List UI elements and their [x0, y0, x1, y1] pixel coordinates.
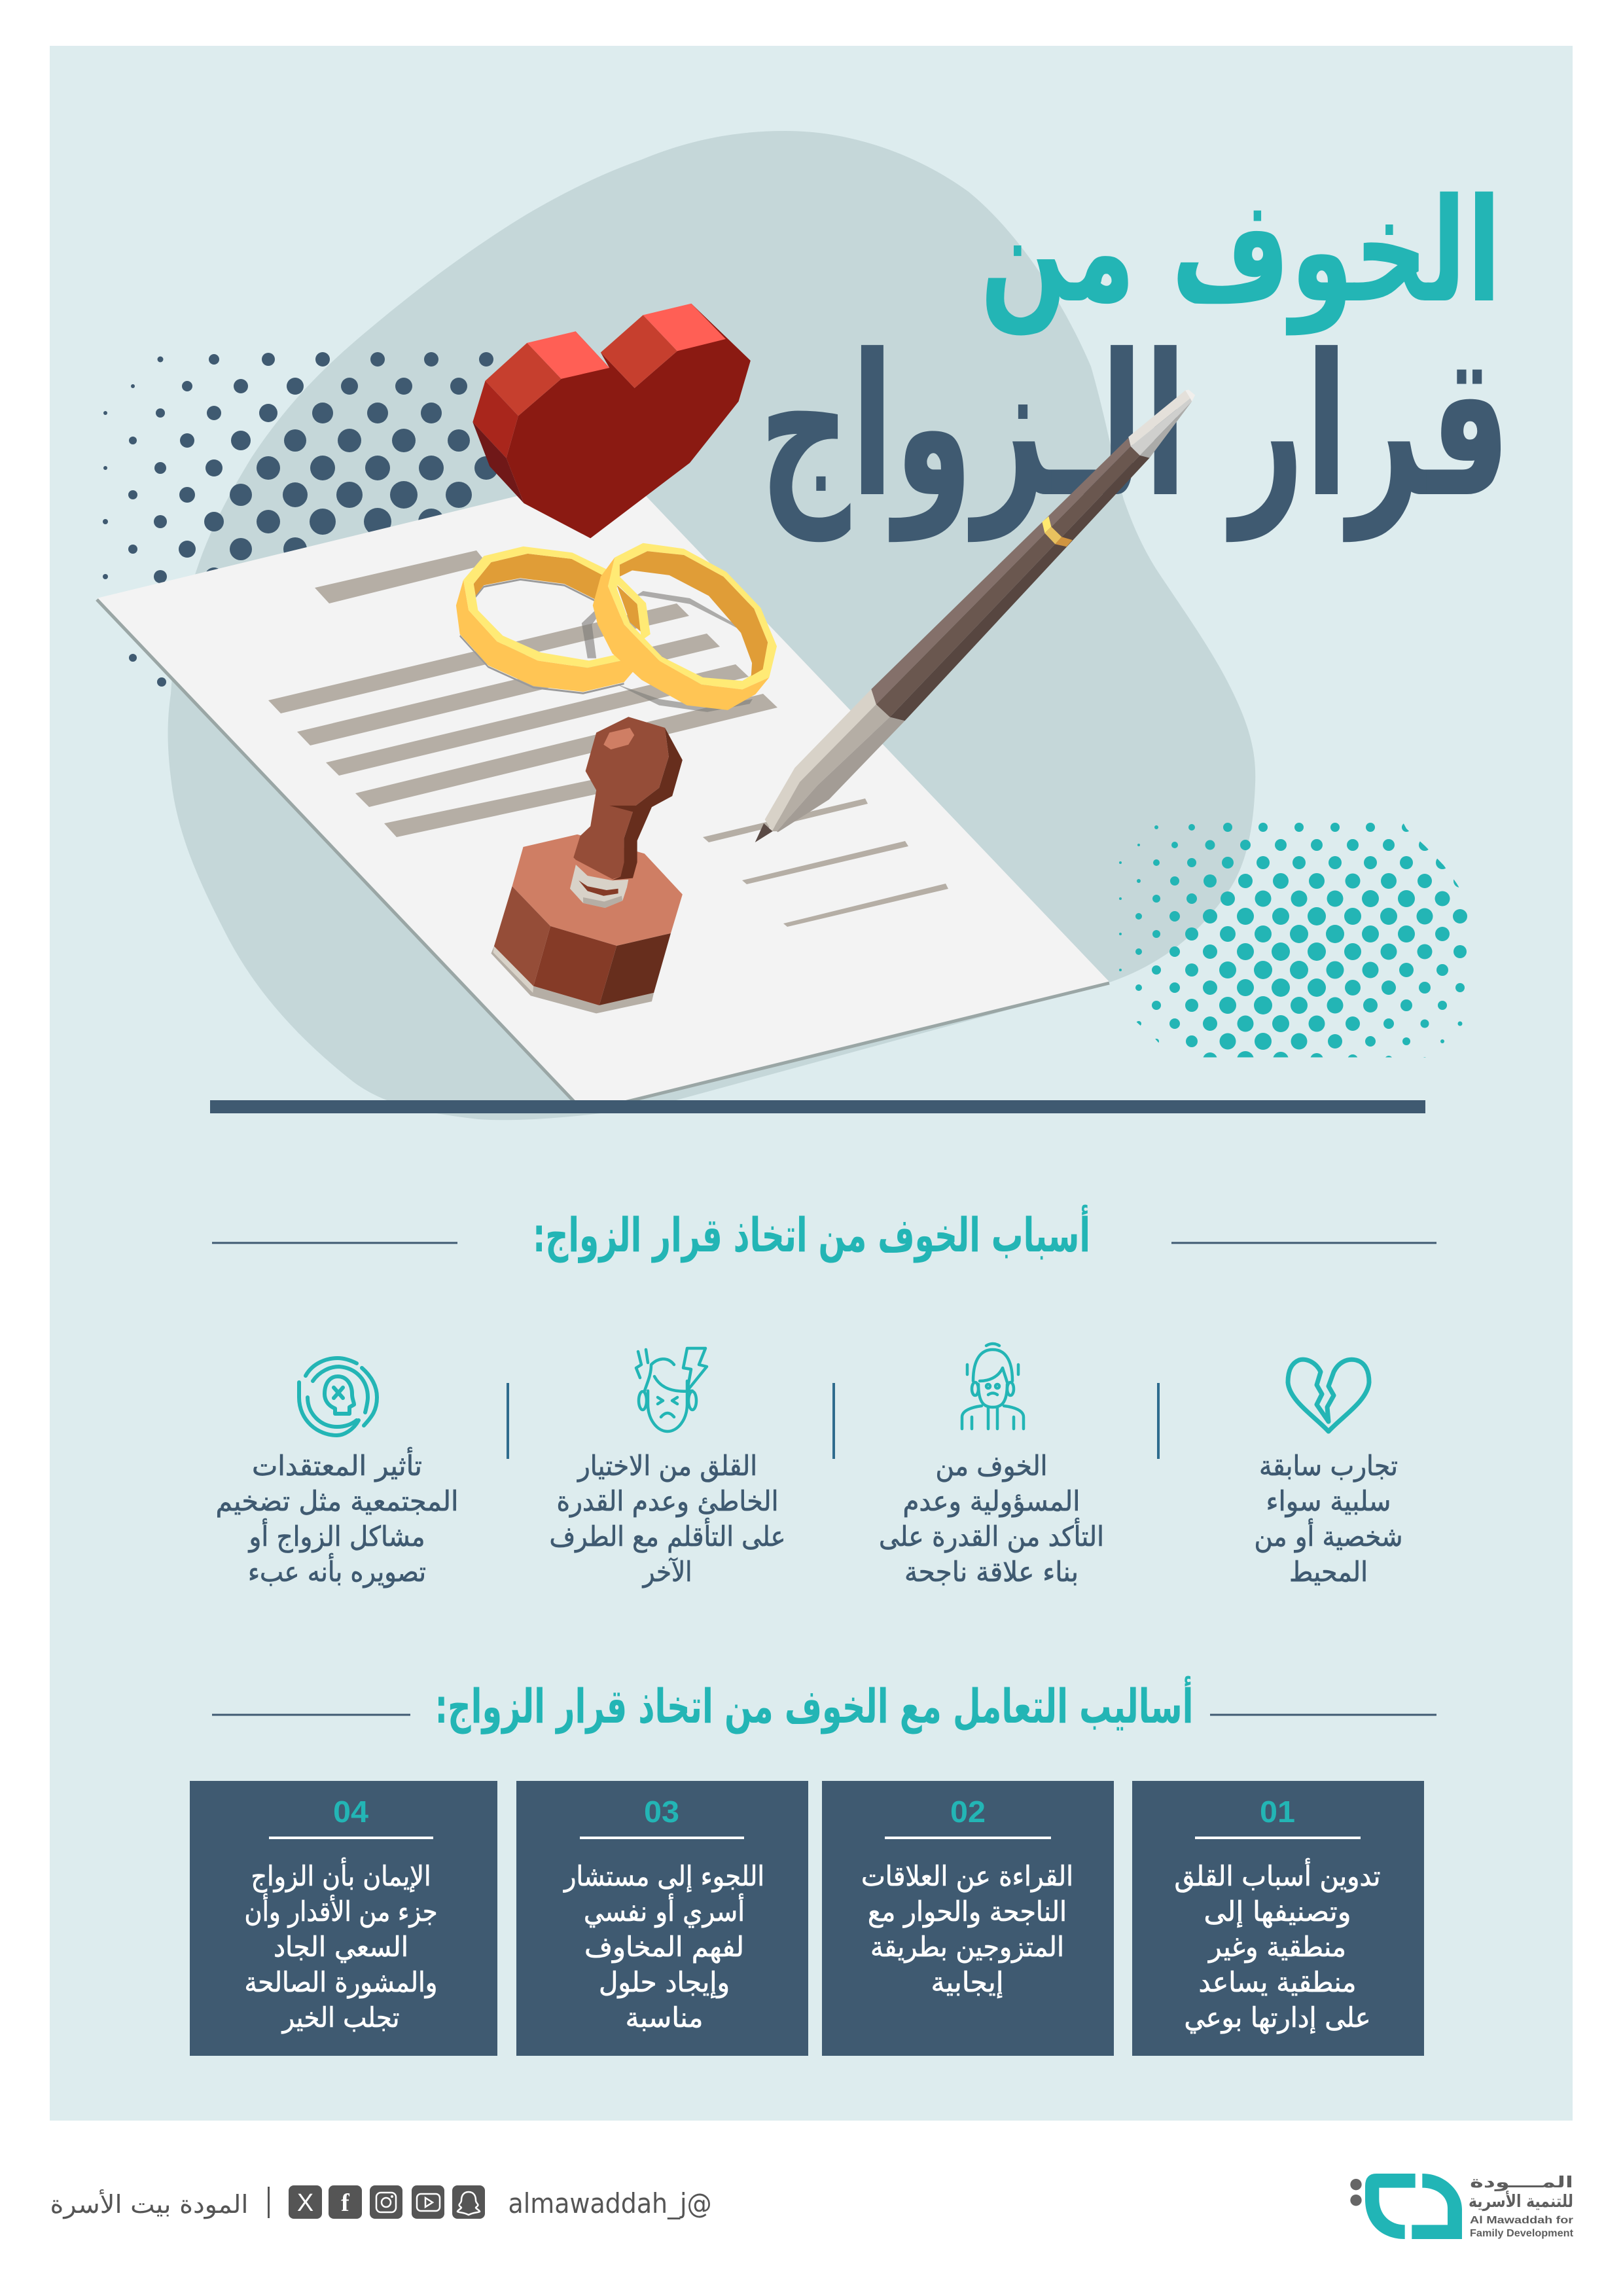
panel: method 03: 03 [644, 1795, 679, 1829]
panel: method 01 [1132, 1781, 1424, 2056]
illustration: pen [755, 389, 1195, 842]
icon: facebook: f [341, 2189, 350, 2217]
cause 3: anxiety about wrong choice: الخاطئ وعدم القدرة [556, 1485, 779, 1517]
icon: head in target rings [299, 1358, 377, 1435]
illustration: wedding rings [456, 543, 777, 712]
illustration: rubber stamp [491, 717, 683, 1013]
cause 1: past experiences: تجارب سابقة [1259, 1450, 1398, 1482]
heading: coping methods: أساليب التعامل مع الخوف من اتخاذ قرار الزواج: [435, 1676, 1194, 1734]
icon: person with headset [962, 1344, 1024, 1429]
icon: stressed head with lightning [636, 1348, 707, 1431]
panel: method 04: السعي الجاد [274, 1931, 408, 1964]
panel: method 04: تجلب الخير [281, 2001, 399, 2034]
cause 4: social beliefs: مشاكل الزواج أو [248, 1518, 425, 1552]
icon: broken heart [1288, 1359, 1369, 1431]
cause 4: social beliefs: تصويره بأنه عبء [248, 1552, 426, 1588]
heading: causes: أسباب الخوف من اتخاذ قرار الزواج: [533, 1204, 1090, 1263]
panel: method 01: وتصنيفها إلى [1204, 1895, 1351, 1928]
paper text lines [268, 550, 948, 927]
causes columns [216, 1344, 1403, 1588]
panel: method 03 [516, 1781, 808, 2056]
panel: method 04: جزء من الأقدار وأن [245, 1893, 437, 1928]
icon: facebook [329, 2185, 362, 2219]
cause 1: past experiences [1254, 1359, 1403, 1588]
cause 1: past experiences: سلبية سواء [1266, 1485, 1391, 1517]
panel: method 02: المتزوجين بطريقة [870, 1931, 1064, 1963]
cause 2: fear of responsibility: التأكد من القدرة على [879, 1517, 1104, 1552]
panel: method 01: منطقية يساعد [1199, 1966, 1356, 1998]
logo text: Family Development [1470, 2228, 1574, 2239]
icon: instagram [370, 2185, 402, 2219]
illustration: red heart [473, 304, 751, 538]
cause 3: anxiety about wrong choice [550, 1348, 785, 1588]
navy halftone dots [103, 352, 498, 687]
footer: brand name: المودة بيت الأسرة [50, 2189, 249, 2219]
icon: youtube [412, 2185, 444, 2219]
logo text: المــــودة [1470, 2173, 1573, 2191]
panel: method 03: أسري أو نفسي [584, 1893, 745, 1928]
panel: method 04 [190, 1781, 497, 2056]
cause 3: anxiety about wrong choice: على التأقلم مع الطرف [550, 1517, 785, 1553]
cause 3: anxiety about wrong choice: القلق من الاختيار [577, 1450, 757, 1482]
panel: method 04: والمشورة الصالحة [245, 1966, 437, 1998]
panel: method 03: وإيجاد حلول [599, 1966, 730, 1999]
cause 2: fear of responsibility [879, 1344, 1104, 1588]
logo text: للتنمية الأسرية [1469, 2191, 1573, 2212]
panel: method 02: القراءة عن العلاقات [861, 1860, 1073, 1892]
logo text: Al Mawaddah for [1470, 2215, 1573, 2226]
cause 2: fear of responsibility: الخوف من [936, 1450, 1047, 1482]
panel: method 01: منطقية وغير [1207, 1931, 1346, 1963]
panel: method 01: 01 [1260, 1795, 1295, 1829]
footer: separator [268, 2187, 270, 2218]
panel: method 02: 02 [950, 1795, 986, 1829]
panel: method 01: على إدارتها بوعي [1185, 2001, 1370, 2034]
teal halftone dots [1119, 823, 1467, 1068]
logo text [1469, 2173, 1574, 2239]
logo [1350, 2173, 1574, 2239]
cause 4: social beliefs [216, 1358, 458, 1588]
panel: method 04: 04 [333, 1795, 368, 1829]
cause 3: anxiety about wrong choice: الآخر [642, 1556, 692, 1588]
panel: method 03: لفهم المخاوف [584, 1931, 744, 1964]
cause 4: social beliefs: تأثير المعتقدات [252, 1446, 422, 1482]
panel: method 02: الناجحة والحوار مع [868, 1895, 1067, 1928]
illustration: paper document [97, 471, 1109, 1103]
cause 4: social beliefs: المجتمعية مثل تضخيم [216, 1485, 458, 1518]
cause 1: past experiences: المحيط [1289, 1556, 1368, 1588]
icon: snapchat [452, 2185, 485, 2219]
footer: social icons [289, 2185, 485, 2219]
footer: handle: almawaddah_j@ [508, 2187, 712, 2219]
logo mark [1350, 2174, 1462, 2239]
decorative blob [168, 131, 1255, 1120]
icon: x [289, 2185, 322, 2219]
cause 2: fear of responsibility: بناء علاقة ناجحة [904, 1556, 1079, 1588]
panel: method 01: تدوين أسباب القلق [1174, 1858, 1381, 1892]
panel: method 02: إيجابية [931, 1966, 1004, 1999]
icon: x: X [297, 2189, 313, 2217]
panel: method 03: مناسبة [626, 2001, 703, 2034]
panel: method 04: الإيمان بأن الزواج [251, 1857, 431, 1892]
column separators [508, 1383, 1158, 1459]
cause 1: past experiences: شخصية أو من [1254, 1518, 1403, 1552]
panel: method 03: اللجوء إلى مستشار [563, 1860, 764, 1893]
cause 2: fear of responsibility: المسؤولية وعدم [903, 1485, 1080, 1517]
divider bar [210, 1100, 1425, 1113]
panel: method 02 [822, 1781, 1114, 2056]
